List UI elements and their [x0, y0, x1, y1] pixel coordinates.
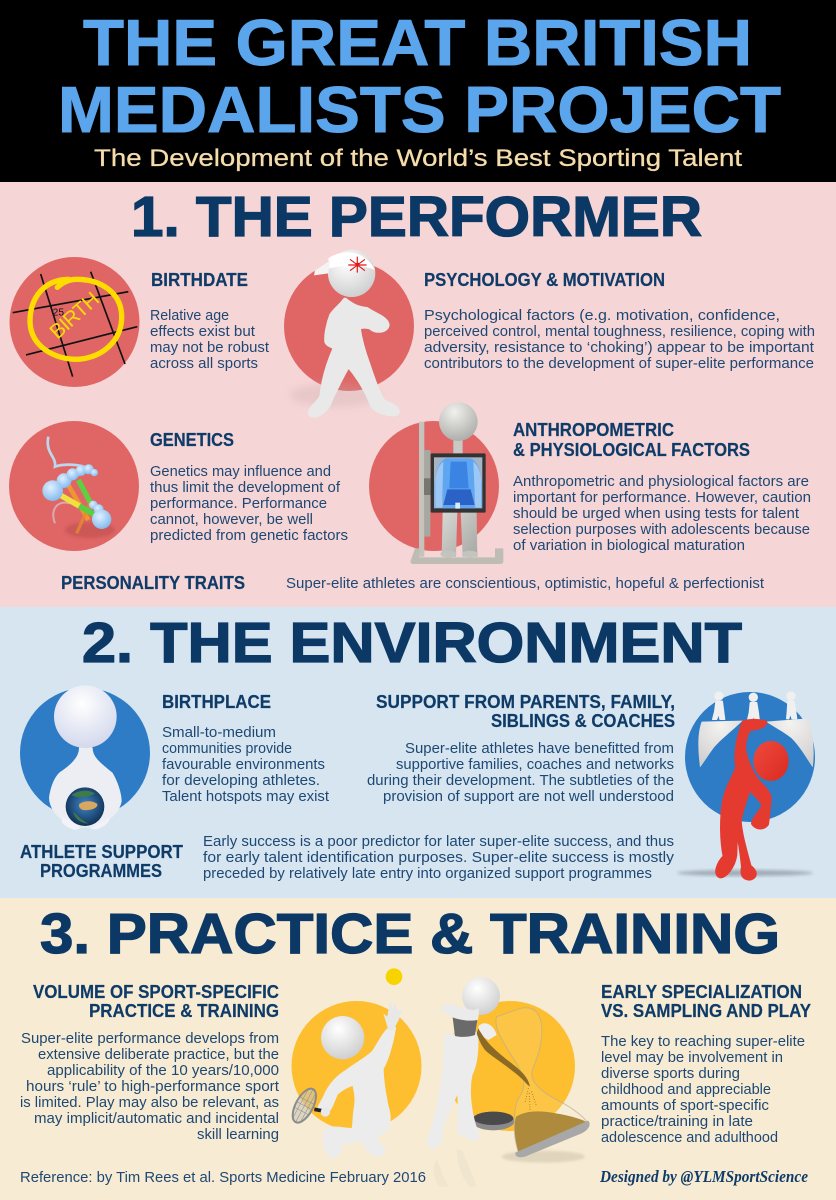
heading: 3. practice and training: 3. PRACTICE & TRAINING	[40, 902, 780, 966]
text block: volume of sport-specific practice and training: skill learning	[197, 1126, 279, 1143]
text block: support from parents, family, siblings and coaches: Super-elite athletes have benefitted from	[405, 740, 674, 757]
panel: practice and training	[0, 898, 836, 1200]
text block: volume of sport-specific practice and training: extensive deliberate practice, but the	[38, 1046, 279, 1063]
text block: athlete support programmes: for early talent identification purposes. Super-elite success is mostly	[203, 849, 675, 866]
title	[58, 6, 781, 146]
text block: personality traits: PERSONALITY TRAITS	[61, 573, 245, 593]
icon: red figure supporting three small figures	[677, 692, 815, 878]
text block: volume of sport-specific practice and training: is limited. Play may also be relevant, as	[20, 1094, 279, 1111]
text block: birthplace	[162, 692, 330, 805]
reference line: Reference: by Tim Rees et al. Sports Medicine February 2016	[20, 1169, 426, 1186]
icon: birthdate calendar: BIRTH	[45, 288, 104, 344]
text block: genetics: Genetics may influence and	[150, 463, 331, 480]
text block: volume of sport-specific practice and training: PRACTICE & TRAINING	[89, 1001, 279, 1021]
text block: genetics: cannot, however, be well	[150, 511, 313, 528]
text block: psychology and motivation: perceived control, mental toughness, resilience, coping with	[424, 323, 815, 340]
text block: birthdate: may not be robust	[150, 339, 270, 356]
text block: early specialization vs. sampling and play: amounts of sport-specific	[601, 1097, 769, 1114]
text block: anthropometric and physiological factors: selection purposes with adolescents because	[513, 521, 810, 538]
text block: anthropometric and physiological factors	[513, 420, 811, 554]
text block: birthplace: favourable environments	[162, 756, 325, 773]
text block: genetics: GENETICS	[150, 430, 234, 450]
text block: genetics	[150, 430, 348, 544]
text block: volume of sport-specific practice and training: may implicit/automatic and incidental	[34, 1110, 279, 1127]
text block: birthdate: across all sports	[150, 355, 258, 372]
text block: early specialization vs. sampling and play: The key to reaching super-elite	[601, 1033, 805, 1050]
text block: athlete support programmes	[20, 833, 675, 882]
text block: athlete support programmes: Early success is a poor predictor for later super-elite success, and thus	[203, 833, 674, 850]
text block: personality traits	[61, 573, 765, 593]
text block: early specialization vs. sampling and play: childhood and appreciable	[601, 1081, 771, 1098]
text block: anthropometric and physiological factors: important for performance. However, caution	[513, 489, 811, 506]
text block: psychology and motivation: PSYCHOLOGY & MOTIVATION	[424, 270, 665, 290]
icon: birthdate calendar: 25	[53, 307, 64, 318]
text block: anthropometric and physiological factors: & PHYSIOLOGICAL FACTORS	[513, 440, 750, 460]
text block: personality traits: Super-elite athletes are conscientious, optimistic, hopeful & perfectionist	[286, 575, 765, 592]
text block: birthdate: effects exist but	[150, 323, 256, 340]
text block: support from parents, family, siblings and coaches: SIBLINGS & COACHES	[491, 711, 675, 731]
heading: 2. the environment: 2. THE ENVIRONMENT	[82, 611, 742, 675]
text block: birthplace: BIRTHPLACE	[162, 692, 271, 712]
panel: the environment	[0, 607, 836, 898]
text block: athlete support programmes: preceded by relatively late entry into organized support programmes	[203, 865, 652, 882]
text block: psychology and motivation: adversity, resistance to ‘choking’) appear to be important	[424, 339, 815, 356]
icon: psychology figure with headband	[284, 250, 414, 415]
icon: birthdate calendar	[10, 257, 140, 387]
text block: birthplace: communities provide	[162, 740, 292, 757]
icon: figure holding globe	[20, 685, 150, 830]
text block: genetics: thus limit the development of	[150, 479, 341, 496]
text block: athlete support programmes: PROGRAMMES	[40, 861, 162, 881]
designer credit: Designed by @YLMSportScience	[599, 1167, 808, 1186]
text block: volume of sport-specific practice and training	[20, 982, 280, 1143]
text block: support from parents, family, siblings and coaches: during their development. The subtleties of the	[367, 772, 674, 789]
text block: birthdate: Relative age	[150, 307, 229, 324]
text block: birthplace: Small-to-medium	[162, 724, 276, 741]
text block: support from parents, family, siblings and coaches: SUPPORT FROM PARENTS, FAMILY,	[376, 692, 675, 712]
icon: figure pouring sand into hourglass	[428, 977, 590, 1187]
text block: genetics: performance. Performance	[150, 495, 327, 512]
text block: birthdate: BIRTHDATE	[151, 270, 248, 290]
text block: genetics: predicted from genetic factors	[150, 527, 348, 544]
icon: tennis player figure	[288, 968, 422, 1157]
text block: psychology and motivation: contributors to the development of super-elite performance	[424, 355, 814, 372]
text block: support from parents, family, siblings and coaches	[367, 692, 675, 805]
icon: body scanner figure	[369, 402, 503, 564]
text block: birthdate	[150, 270, 270, 372]
text block: anthropometric and physiological factors: of variation in biological maturation	[513, 537, 745, 554]
text block: volume of sport-specific practice and training: Super-elite performance develops from	[21, 1030, 279, 1047]
header panel	[0, 0, 836, 182]
text block: early specialization vs. sampling and play: adolescence and adulthood	[601, 1129, 778, 1146]
text block: volume of sport-specific practice and training: applicability of the 10 years/10,000	[47, 1062, 279, 1079]
text block: early specialization vs. sampling and play: VS. SAMPLING AND PLAY	[601, 1001, 811, 1021]
text block: volume of sport-specific practice and training: hours ‘rule’ to high-performance sport	[26, 1078, 280, 1095]
text block: birthplace: Talent hotspots may exist	[162, 788, 330, 805]
text block: birthplace: for developing athletes.	[162, 772, 320, 789]
text block: athlete support programmes: ATHLETE SUPPORT	[20, 842, 183, 862]
icon: genetics DNA model	[9, 421, 139, 551]
text block: anthropometric and physiological factors: ANTHROPOMETRIC	[513, 420, 674, 440]
text block: anthropometric and physiological factors: should be urged when using tests for talent	[513, 505, 800, 522]
text block: early specialization vs. sampling and play	[601, 982, 811, 1146]
heading: 1. the performer: 1. THE PERFORMER	[131, 185, 702, 249]
text block: psychology and motivation: Psychological factors (e.g. motivation, confidence,	[424, 307, 780, 324]
subtitle: The Development of the World’s Best Sporting Talent	[94, 145, 742, 172]
text block: support from parents, family, siblings and coaches: supportive families, coaches and networks	[396, 756, 674, 773]
text block: psychology and motivation	[424, 270, 815, 372]
text block: early specialization vs. sampling and play: practice/training in late	[601, 1113, 753, 1130]
text block: early specialization vs. sampling and play: EARLY SPECIALIZATION	[601, 982, 802, 1002]
text block: anthropometric and physiological factors: Anthropometric and physiological factors are	[513, 473, 809, 490]
panel: the performer	[0, 182, 836, 607]
title: MEDALISTS PROJECT	[58, 73, 781, 146]
title: THE GREAT BRITISH	[83, 6, 752, 79]
text block: early specialization vs. sampling and play: level may be involvement in	[601, 1049, 783, 1066]
text block: support from parents, family, siblings and coaches: provision of support are not well understood	[383, 788, 674, 805]
text block: early specialization vs. sampling and play: diverse sports during	[601, 1065, 740, 1082]
text block: volume of sport-specific practice and training: VOLUME OF SPORT-SPECIFIC	[33, 982, 279, 1002]
